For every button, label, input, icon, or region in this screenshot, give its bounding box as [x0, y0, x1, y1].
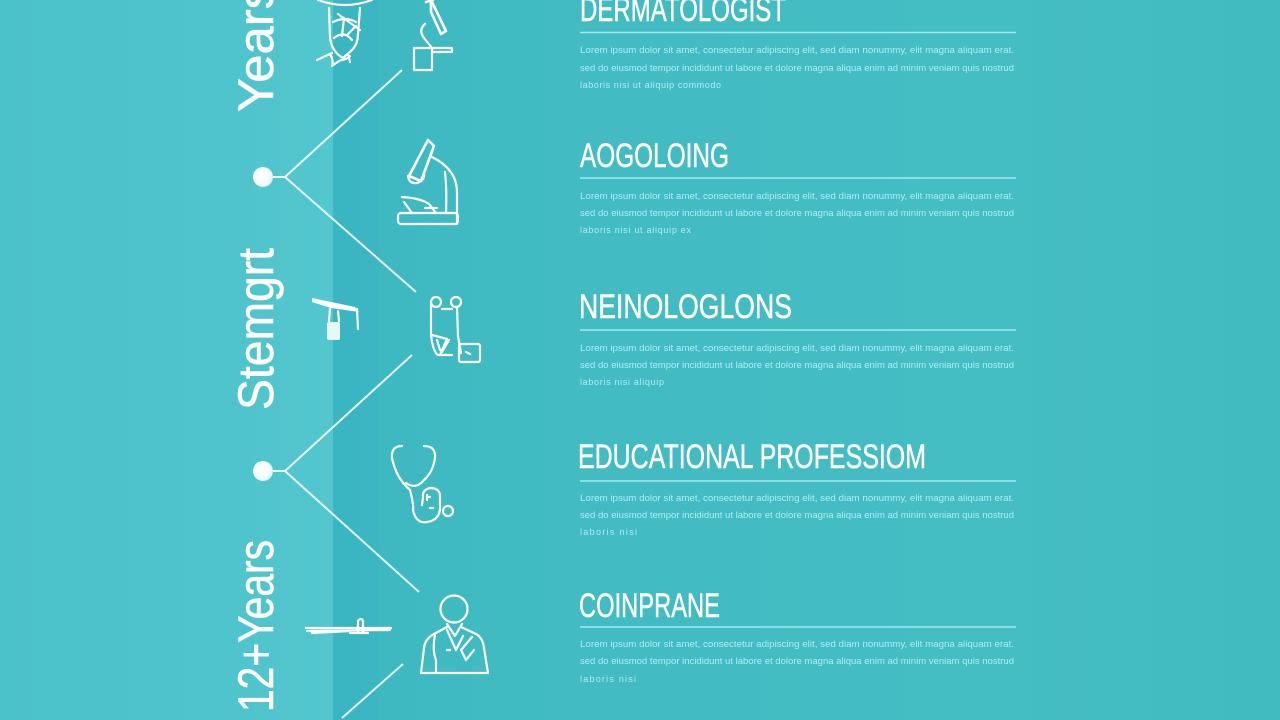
description: laboris nisi: [580, 674, 636, 684]
heading: NEINOLOGLONS: [579, 288, 792, 326]
description: [580, 639, 1014, 684]
description: [580, 343, 1014, 387]
entry: Neinologlons: [579, 288, 1016, 387]
icon: horizontal instrument: [306, 619, 391, 633]
description: sed do eiusmod tempor incididunt ut labore et dolore magna aliqua enim ad minim veniam quis nostrud: [580, 360, 1014, 370]
description: sed do eiusmod tempor incididunt ut labore et dolore magna aliqua enim ad minim veniam quis nostrud: [580, 510, 1014, 520]
description: laboris nisi: [580, 527, 637, 537]
description: Lorem ipsum dolor sit amet, consectetur adipiscing elit, sed diam nonummy, elit magna aliquam erat.: [580, 493, 1014, 503]
description: Lorem ipsum dolor sit amet, consectetur adipiscing elit, sed diam nonummy, elit magna aliquam erat.: [580, 45, 1014, 55]
description: sed do eiusmod tempor incididunt ut labore et dolore magna aliqua enim ad minim veniam quis nostrud: [580, 208, 1014, 218]
entry: Educational Profession: [578, 438, 1016, 537]
description: [580, 45, 1014, 90]
description: [580, 493, 1014, 537]
icon: medical bag: [431, 297, 480, 362]
entry: Coinprane: [579, 587, 1016, 684]
icon: graduation cap: [312, 298, 359, 340]
description: sed do eiusmod tempor incididunt ut labore et dolore magna aliqua enim ad minim veniam quis nostrud: [580, 656, 1014, 666]
heading: EDUCATIONAL PROFESSIOM: [578, 438, 926, 476]
description: [580, 191, 1014, 235]
timeline branch three: [342, 664, 403, 718]
description: Lorem ipsum dolor sit amet, consectetur adipiscing elit, sed diam nonummy, elit magna aliquam erat.: [580, 191, 1014, 201]
heading: COINPRANE: [579, 587, 720, 625]
description: sed do eiusmod tempor incididunt ut labore et dolore magna aliqua enim ad minim veniam quis nostrud: [580, 63, 1014, 73]
description: laboris nisi ut aliquip ex: [580, 225, 692, 235]
timeline branch one: [253, 70, 416, 292]
icon: microscope top: [414, 0, 452, 70]
entry: Dermatologist: [580, 0, 1016, 90]
icon: doctor: [421, 596, 488, 673]
timeline branch two: [253, 355, 419, 592]
description: Lorem ipsum dolor sit amet, consectetur adipiscing elit, sed diam nonummy, elit magna aliquam erat.: [580, 343, 1014, 353]
icon: stethoscope: [392, 446, 453, 522]
entry: Aogoloing: [580, 137, 1016, 235]
description: Lorem ipsum dolor sit amet, consectetur adipiscing elit, sed diam nonummy, elit magna aliquam erat.: [580, 639, 1014, 649]
icon: microscope: [398, 140, 458, 224]
timeline label: Stemgrt: Stemgrt: [228, 248, 284, 410]
timeline label: 12+ Years: 12+Years: [228, 540, 284, 712]
description: laboris nisi ut aliquip commodo: [580, 80, 721, 90]
description: laboris nisi aliquip: [580, 377, 664, 387]
heading: AOGOLOING: [580, 137, 729, 175]
icon: figure: [317, 0, 372, 66]
